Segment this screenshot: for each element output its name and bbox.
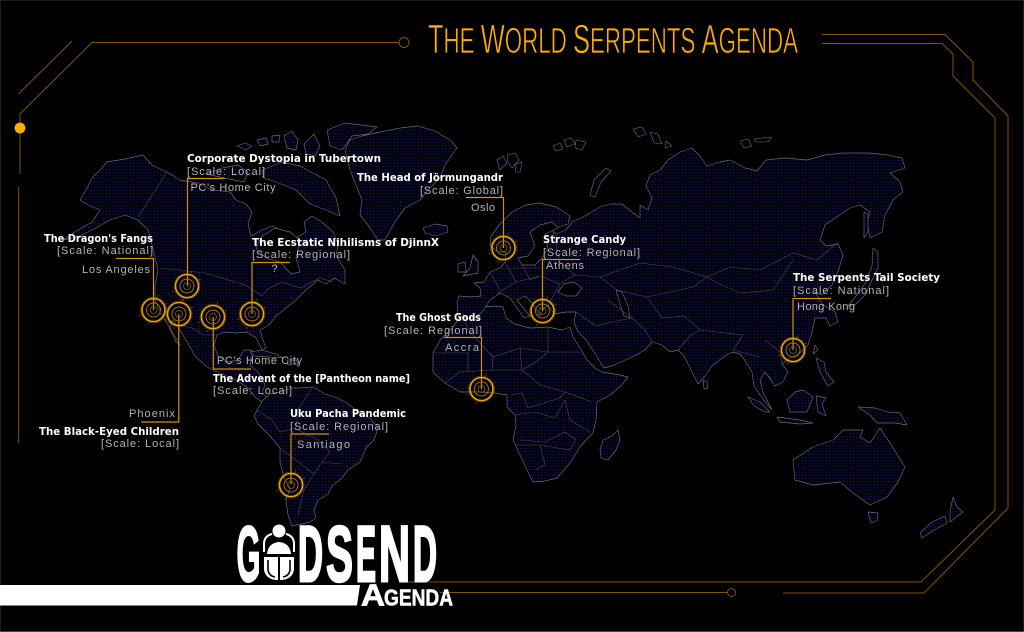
marker ring [488, 233, 518, 263]
callout title: The Ecstatic Nihilisms of DjinnX [252, 236, 439, 249]
leader line [213, 317, 251, 369]
leader line [793, 298, 831, 350]
leader line [116, 258, 154, 310]
logo word: Agenda: A [361, 578, 385, 612]
world map [63, 123, 963, 538]
city: Santiago [297, 439, 350, 451]
city: Phoenix [129, 408, 176, 420]
landmass: Southeast Asian islands [748, 345, 834, 424]
city: PC's Home City [190, 182, 276, 194]
landmass: Canadian Arctic islands [206, 123, 377, 216]
marker ring [528, 296, 556, 326]
landmass: Greenland [345, 126, 457, 240]
callout: The Advent of the [Pantheon name] [198, 302, 410, 397]
scale: [Scale: Regional] [252, 249, 350, 261]
callout title: Strange Candy [543, 233, 626, 246]
marker ring [164, 299, 193, 329]
callout: The Head of Jörmungandr [357, 171, 518, 263]
landmass: Cuba and Caribbean [250, 350, 298, 365]
leader line [444, 338, 482, 389]
callout: Strange Candy [528, 233, 640, 326]
marker ring [172, 271, 201, 301]
landmass: Africa [433, 306, 628, 482]
landmass: South America [254, 387, 378, 526]
logo word: Godsend [236, 509, 437, 598]
city: Accra [445, 342, 480, 354]
marker ring [237, 299, 266, 329]
landmass: New Zealand [920, 497, 963, 538]
frame node: bottom circle [728, 588, 736, 596]
landmass: Tasmania [868, 512, 878, 523]
city: Oslo [471, 202, 495, 214]
logo word: Agenda [361, 578, 453, 612]
marker ring [466, 374, 496, 404]
callout: The Serpents Tail Society [778, 271, 940, 365]
marker ring [276, 470, 305, 500]
scale: [Scale: Regional] [384, 325, 482, 337]
leader line [188, 178, 225, 286]
frame node: orange dot [15, 123, 25, 133]
icon: scarab [264, 524, 294, 580]
logo: Godsend Agenda: D [413, 509, 437, 598]
landmass: British Isles [458, 255, 478, 276]
landmass: Eurasia [457, 148, 905, 410]
Baltic Sea [518, 222, 558, 265]
callout title: The Head of Jörmungandr [357, 171, 504, 184]
Black Sea [558, 282, 582, 296]
landmass: Iceland [423, 224, 448, 236]
marker ring [198, 302, 227, 332]
city: PC's Home City [217, 355, 302, 367]
logo word: Godsend: G [236, 509, 260, 598]
logo word: Godsend: D [298, 509, 323, 598]
city: Hong Kong [797, 301, 855, 313]
leader line [542, 260, 580, 311]
logo word: Godsend: S [326, 509, 353, 598]
landmass: North America [63, 155, 345, 402]
scale: [Scale: Regional] [543, 247, 640, 259]
landmass: Madagascar [600, 430, 620, 460]
callout title: The Ghost Gods [396, 311, 481, 324]
scale: [Scale: Local] [187, 166, 265, 178]
callout title: Corporate Dystopia in Tubertown [187, 152, 381, 165]
logo word: Godsend: E [356, 509, 376, 598]
callout title: The Dragon's Fangs [44, 232, 153, 245]
title: THE WORLD SERPENTS AGENDA [428, 16, 798, 62]
scale: [Scale: Local] [101, 438, 179, 450]
Caspian Sea [616, 290, 630, 318]
national borders [138, 172, 837, 515]
city: Los Angeles [82, 264, 150, 276]
leader line [252, 262, 290, 314]
logo bar [0, 585, 360, 606]
scale: [Scale: National] [57, 245, 153, 257]
callout: The Black-Eyed Children [39, 299, 193, 450]
landmass: Japan and Sakhalin [848, 212, 878, 306]
frame node: top circle [399, 38, 409, 48]
logo word: Godsend: N [379, 509, 410, 598]
Hudson Bay [256, 228, 300, 274]
callout title: The Black-Eyed Children [39, 425, 179, 438]
landmass: New Guinea [858, 407, 907, 425]
callout title: Uku Pacha Pandemic [290, 407, 406, 420]
callout title: The Serpents Tail Society [793, 271, 940, 284]
callout title: The Advent of the [Pantheon name] [213, 372, 410, 385]
city: Athens [546, 260, 584, 272]
callout: Uku Pacha Pandemic [276, 407, 406, 500]
arctic ocean island clusters [497, 127, 772, 197]
city: ? [272, 263, 278, 275]
callout: The Dragon's Fangs [44, 232, 168, 325]
landmass: Australia [793, 428, 905, 505]
scale: [Scale: National] [793, 285, 889, 297]
leader line [141, 314, 179, 422]
leader line [466, 198, 504, 248]
scale: [Scale: Global] [420, 185, 503, 197]
marker ring [138, 295, 168, 325]
callout: The Ghost Gods [384, 311, 496, 404]
callout: The Ecstatic Nihilisms of DjinnX [237, 236, 439, 329]
landmass: Sri Lanka [703, 380, 708, 389]
callout: Corporate Dystopia in Tubertown [172, 152, 381, 301]
logo word: Agenda: GENDA [384, 584, 453, 610]
logo: Godsend Agenda [0, 509, 453, 612]
marker ring [778, 335, 807, 365]
leader line [291, 434, 329, 484]
scale: [Scale: Regional] [290, 421, 388, 433]
scale: [Scale: Local] [213, 385, 292, 397]
